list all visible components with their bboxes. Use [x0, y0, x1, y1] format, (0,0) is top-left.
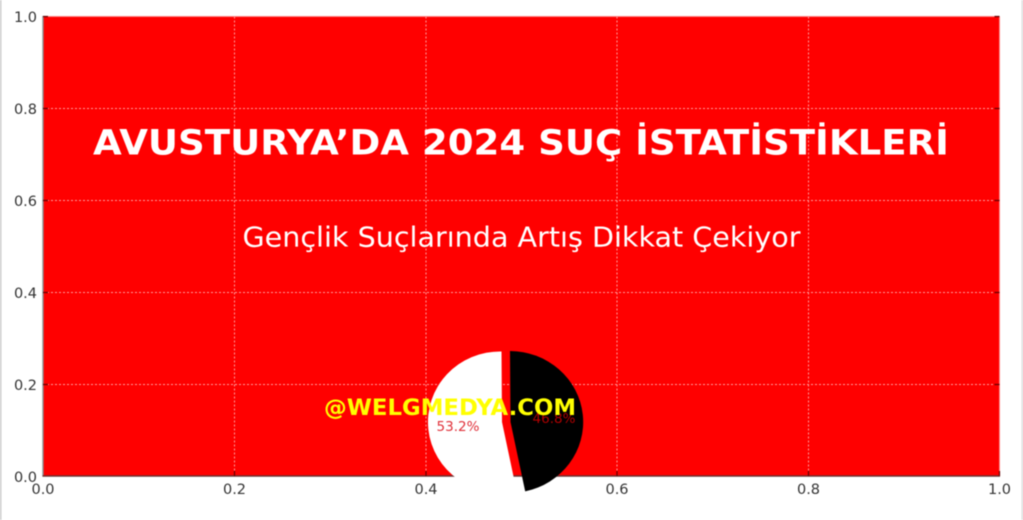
- pie label: 53.2%: 53.2%: [437, 419, 480, 435]
- pie chart: [428, 351, 583, 492]
- y axis labels: 0.6: [14, 194, 37, 210]
- x axis labels: 0.4: [414, 482, 438, 498]
- y axis labels: 0.8: [14, 102, 37, 118]
- x axis labels: [31, 482, 1011, 498]
- watermark: @WELGMEDYA.COM: [324, 395, 576, 421]
- y axis labels: 0.0: [14, 470, 37, 486]
- title: AVUSTURYA’DA 2024 SUÇ İSTATİSTİKLERİ: [93, 122, 949, 164]
- y axis labels: 0.2: [14, 378, 37, 394]
- x axis labels: 0.2: [223, 482, 246, 498]
- pie slice: black 46.8%: [510, 351, 583, 491]
- x axis labels: 0.0: [31, 482, 55, 498]
- y axis labels: 1.0: [14, 10, 37, 26]
- x axis labels: 0.8: [797, 482, 820, 498]
- x axis labels: 1.0: [988, 482, 1011, 498]
- subtitle: Gençlik Suçlarında Artış Dikkat Çekiyor: [242, 222, 801, 254]
- pie slice: white 53.2%: [428, 351, 516, 492]
- pie label: 46.8%: 46.8%: [533, 411, 576, 427]
- x axis labels: 0.6: [605, 482, 629, 498]
- y axis labels: [14, 10, 37, 486]
- y axis labels: 0.4: [14, 286, 37, 302]
